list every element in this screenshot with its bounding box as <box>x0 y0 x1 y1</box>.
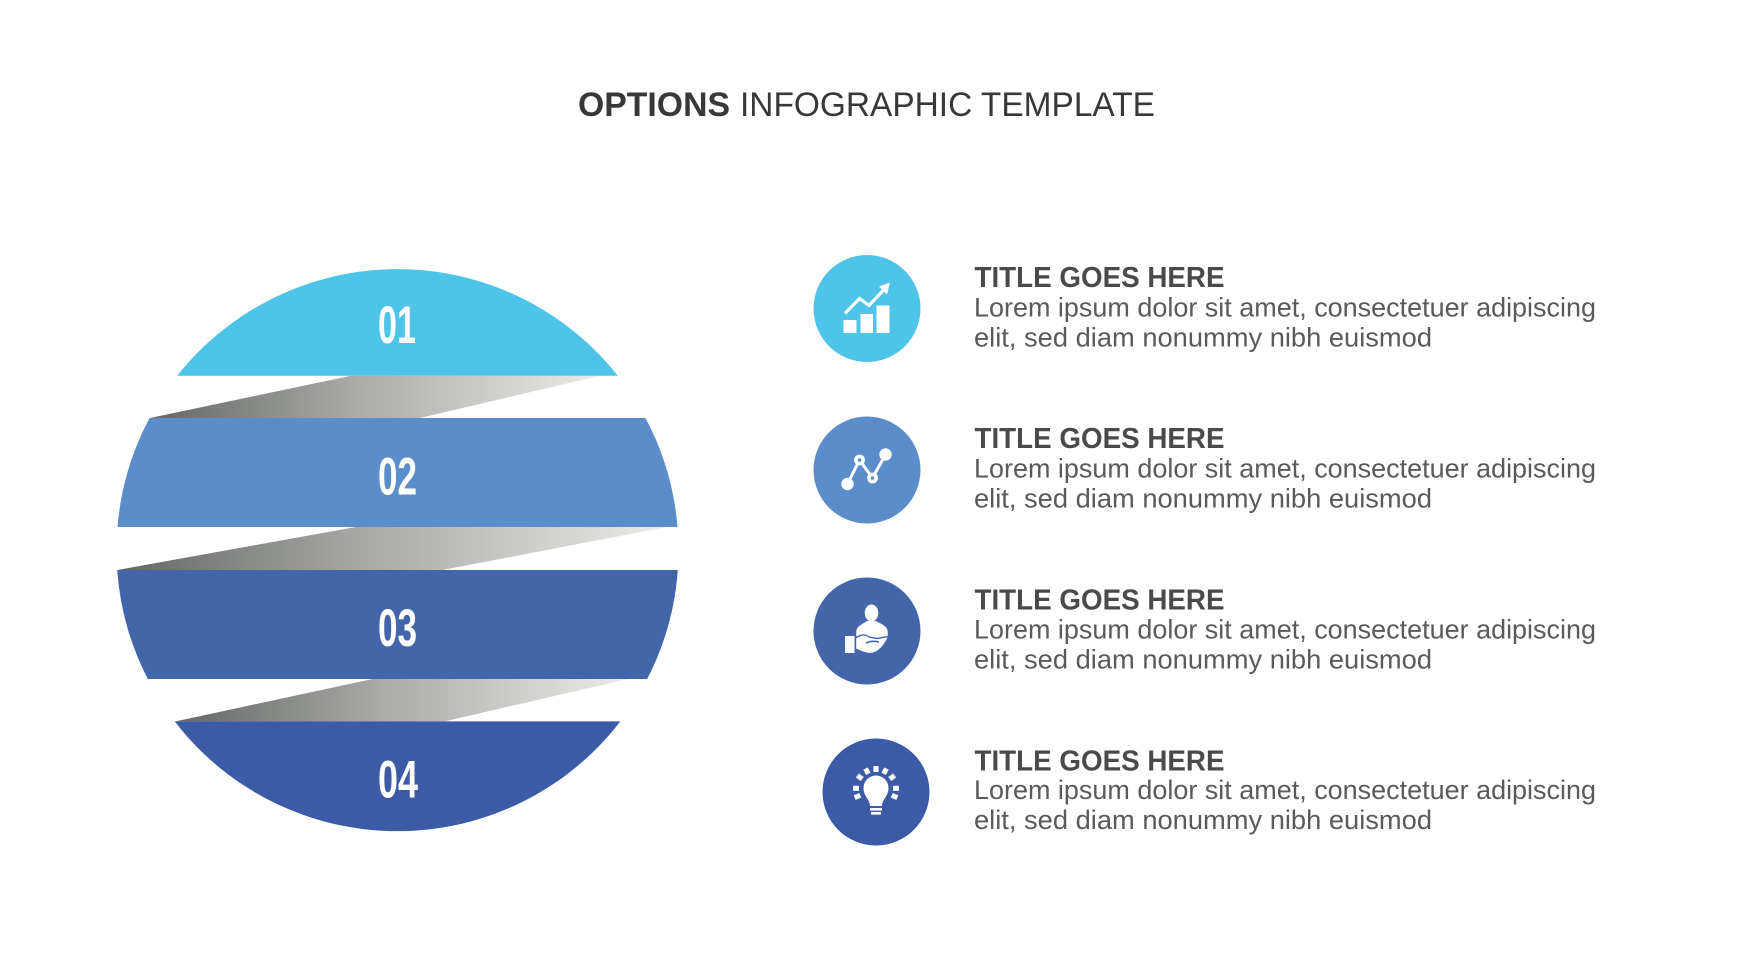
option 3 icon: person on hand <box>814 578 920 684</box>
option 3 text: elit, sed diam nonummy nibh euismod <box>974 644 1432 674</box>
option 2 text: Lorem ipsum dolor sit amet, consectetuer adipiscing <box>974 454 1596 484</box>
option 2 icon: line nodes <box>814 416 920 524</box>
ribbon connector 2 <box>118 527 667 570</box>
ribbon connector 3 <box>176 679 628 721</box>
option 2 text: TITLE GOES HERE <box>974 423 1224 455</box>
option 4 text: Lorem ipsum dolor sit amet, consectetuer adipiscing <box>974 775 1596 805</box>
circular diagram <box>117 269 678 831</box>
option 1 text: Lorem ipsum dolor sit amet, consectetuer adipiscing <box>974 292 1596 322</box>
option 1 text: TITLE GOES HERE <box>974 262 1224 294</box>
segment 02: 02 <box>378 448 417 506</box>
option 4 text <box>974 746 1596 835</box>
option 4 text: elit, sed diam nonummy nibh euismod <box>974 805 1432 835</box>
segment 04: 04 <box>378 750 418 810</box>
title: INFOGRAPHIC TEMPLATE <box>740 86 1155 124</box>
segment 02 <box>118 418 678 527</box>
option 1 icon: growth chart <box>814 255 920 362</box>
segment 01 <box>177 269 618 376</box>
option 3 text <box>974 584 1596 674</box>
segment 03: 03 <box>378 599 417 658</box>
option 2 text: elit, sed diam nonummy nibh euismod <box>974 484 1432 514</box>
option 3 text: Lorem ipsum dolor sit amet, consectetuer adipiscing <box>974 614 1596 644</box>
option 4 icon: light bulb <box>822 738 930 846</box>
segment 04 <box>175 721 620 831</box>
ribbon connector 1 <box>150 376 600 418</box>
option 4 text: TITLE GOES HERE <box>974 746 1224 778</box>
option 1 text: elit, sed diam nonummy nibh euismod <box>974 322 1432 352</box>
segment 03 <box>117 570 678 679</box>
option 2 text <box>974 423 1596 514</box>
option 3 text: TITLE GOES HERE <box>974 584 1224 616</box>
segment 01: 01 <box>378 296 416 355</box>
option 1 text <box>974 262 1596 352</box>
title: OPTIONS <box>578 86 730 124</box>
